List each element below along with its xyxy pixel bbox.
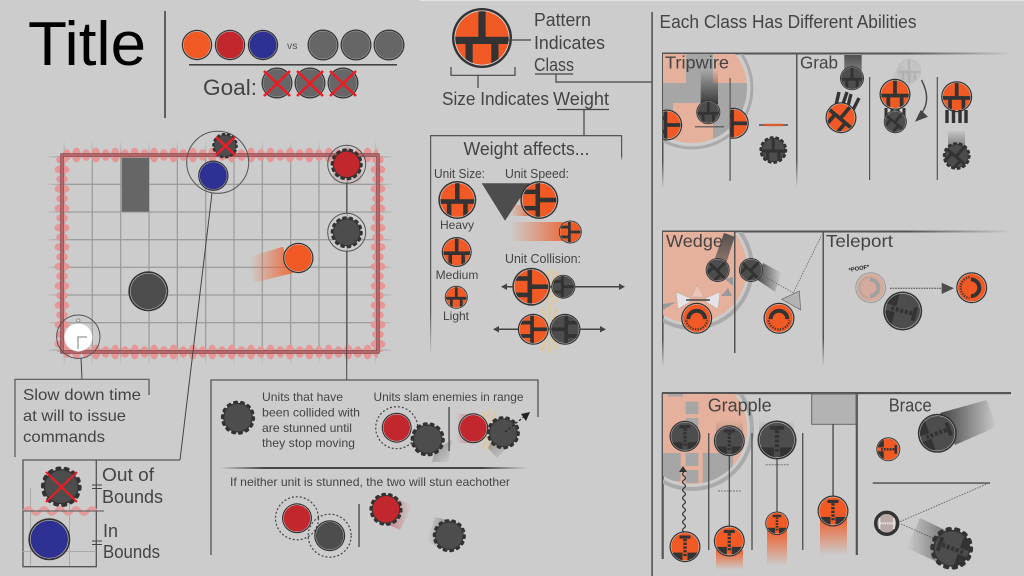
boundary wave: [24, 508, 96, 514]
size label: Size Indicates: [442, 89, 549, 109]
weight effects panel: [430, 135, 625, 355]
brace enemy stunned: [907, 518, 979, 574]
tripwire heading: Tripwire: [665, 53, 729, 73]
teleport origin ghost: [855, 272, 886, 303]
out of bounds example: [43, 468, 80, 505]
slam after: [456, 410, 530, 458]
stunned grey unit: [328, 213, 366, 251]
tripwire range circle: [663, 54, 754, 150]
teleport arrow: [890, 283, 954, 294]
slow time callout: commands: [23, 429, 105, 446]
brace unit after: [876, 512, 898, 534]
player units: [182, 30, 278, 60]
unit size column: Light: [443, 309, 470, 323]
tripwire left unit: [663, 110, 682, 140]
panel: wedge: Wedge: [666, 231, 723, 251]
brace enemy approaching: [911, 400, 997, 459]
tripwire right unit: [730, 108, 749, 139]
unit size column: Unit Size:: [434, 167, 485, 181]
bounds legend: Bounds: [103, 542, 160, 562]
stun rules panel: [211, 380, 538, 557]
grapple step three: [758, 420, 796, 566]
weight effects panel: Weight affects...: [464, 138, 590, 159]
pattern label: [534, 10, 605, 75]
pattern label: Indicates: [534, 33, 605, 53]
panel: grapple: [663, 394, 856, 569]
goal: [203, 68, 358, 100]
stunned unit definition: are stunned until: [262, 421, 352, 435]
wedge unit left: [681, 303, 712, 334]
wedge unit right: [764, 303, 794, 334]
unit collision column: [493, 252, 625, 353]
unit speed column: Unit Speed:: [505, 167, 569, 181]
in bounds example: [28, 518, 70, 560]
slam description: Units slam enemies in range: [374, 390, 524, 404]
grab step one: [819, 55, 864, 140]
grapple range circle: [663, 394, 754, 491]
panel: teleport: [826, 231, 987, 333]
panel divider: [219, 467, 527, 469]
enemy units: [308, 30, 404, 60]
team matchup: [182, 30, 404, 66]
size label: [442, 89, 609, 109]
stunned unit definition: Units that have: [262, 390, 343, 404]
tripwire enemy approach: [695, 70, 724, 127]
panel: brace: Brace: [889, 396, 932, 416]
slam before: [376, 407, 452, 462]
out of bounds enemy: [213, 134, 237, 157]
poof label: *POOF*: [848, 264, 871, 274]
unit speed column: [505, 167, 582, 244]
tripped wire and stunned enemy: [759, 124, 788, 163]
dark enemy unit: [128, 271, 168, 311]
versus label: vs: [287, 40, 298, 52]
bounds legend: In: [103, 521, 118, 541]
stunned unit definition: [222, 390, 360, 450]
panel: grab: Grab: [800, 53, 838, 73]
size bracket: [451, 67, 515, 88]
board grid: [64, 140, 376, 366]
weight triangle: [482, 183, 530, 221]
bounds legend: Bounds: [102, 487, 163, 507]
brace range lines: [900, 483, 989, 538]
wedge enemy right: [734, 235, 822, 310]
panel: brace: [873, 396, 997, 574]
moving orange unit: [250, 243, 314, 283]
panel: wedge: [663, 232, 822, 353]
goal: Goal:: [203, 75, 257, 100]
brace unit before: [875, 437, 900, 461]
title divider: [164, 11, 166, 118]
size label: Weight: [553, 89, 609, 109]
blue unit with callout ring: [187, 131, 249, 193]
panel: tripwire and grab frame: [662, 52, 1012, 189]
mutual stun after: [371, 494, 464, 551]
out of bounds hazard border: [54, 147, 386, 360]
panel: teleport: Teleport: [826, 231, 893, 251]
pattern label: Pattern: [534, 10, 591, 30]
bounds legend: [23, 460, 180, 567]
grab step two: [879, 60, 928, 138]
teleport destination unit: [956, 272, 987, 303]
class and weight key: [442, 8, 652, 135]
stunned unit definition: they stop moving: [262, 436, 355, 450]
grapple step two: [714, 420, 745, 570]
unit size column: Medium: [436, 268, 478, 282]
wedge burst: [663, 277, 733, 310]
panel: grab: [800, 53, 975, 180]
slow time callout: at will to issue: [23, 408, 126, 425]
teleport enemy: [877, 287, 922, 333]
grapple step four: [812, 394, 856, 555]
example unit: [452, 8, 512, 68]
panel: tripwire: [663, 54, 788, 181]
mutual stun description: If neither unit is stunned, the two will stun eachother: [230, 475, 510, 489]
slow time callout: [15, 379, 149, 457]
slow time callout: Slow down time: [23, 387, 141, 404]
bounds legend: Out of: [102, 465, 155, 485]
unit size column: [434, 167, 485, 323]
title: Title: [28, 10, 146, 79]
abilities section heading: Each Class Has Different Abilities: [660, 12, 916, 32]
panel: grapple: Grapple: [708, 396, 772, 416]
mutual stun before: [276, 497, 351, 557]
pattern label: Class: [534, 55, 574, 75]
stunned unit definition: been collided with: [262, 406, 360, 420]
wedge range circle: [663, 232, 753, 330]
connector lines: [81, 183, 347, 460]
grab step three: [938, 81, 975, 174]
unit size column: Heavy: [440, 218, 474, 232]
panel: grapple and brace frame: [662, 392, 1011, 559]
panel: wedge and teleport frame: [662, 230, 1012, 367]
stunned red unit: [328, 145, 366, 186]
unit collision column: Unit Collision:: [505, 252, 581, 266]
game board: [45, 131, 395, 366]
stopwatch: [57, 315, 100, 358]
wedge enemy left: [701, 233, 735, 287]
grapple step one: [670, 421, 700, 563]
wall block: [122, 158, 149, 212]
